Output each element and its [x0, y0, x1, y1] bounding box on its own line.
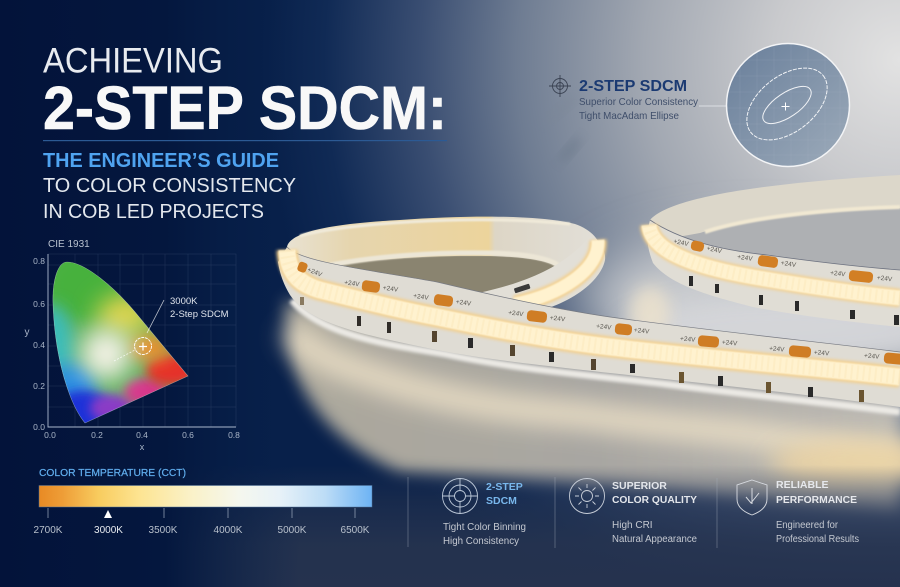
- feature description: [443, 522, 526, 547]
- front strip markings: pills, voltage labels and chips: +24V: [680, 335, 696, 344]
- y axis tick labels: 0.4: [33, 340, 45, 350]
- scale labels: 3500K: [149, 525, 178, 536]
- panel: color temperature scale: [34, 468, 372, 536]
- feature description: Tight Color Binning: [443, 522, 526, 533]
- 3000K pointer: [104, 510, 112, 518]
- panel: feature 2-step SDCM: [442, 478, 526, 547]
- front strip markings: pills, voltage labels and chips: +24V: [549, 315, 566, 324]
- chart axes: [48, 254, 236, 427]
- title line: 2-Step SDCM: 2-STEP SDCM:: [43, 74, 447, 142]
- feature heading: RELIABLE: [776, 479, 828, 491]
- feature heading: [486, 481, 523, 507]
- scale labels: 6500K: [341, 525, 370, 536]
- right loop markings: pills, voltage labels and chips: +24V: [780, 260, 797, 269]
- front strip markings: pills, voltage labels and chips: +24V: [634, 327, 650, 336]
- scale labels: 4000K: [214, 525, 243, 536]
- title: [43, 42, 447, 142]
- leader line: [699, 105, 726, 107]
- x axis tick labels: 0.2: [91, 430, 103, 440]
- 3000K target marker: [114, 300, 164, 361]
- x axis title: x: [140, 442, 145, 452]
- scale ticks: [48, 508, 355, 518]
- front strip markings: pills, voltage labels and chips: +24V: [864, 352, 880, 361]
- y axis tick labels: 0.8: [33, 256, 45, 266]
- feature heading: COLOR QUALITY: [612, 494, 697, 506]
- callout heading: 2-STEP SDCM: [579, 78, 687, 95]
- LED strip: left rear loop: [287, 217, 602, 300]
- y axis tick labels: [33, 256, 45, 432]
- chart grid: [48, 254, 236, 427]
- x axis tick labels: [44, 430, 240, 440]
- front strip markings: pills, voltage labels and chips: +24V: [413, 293, 430, 302]
- chromaticity gamut: [52, 262, 188, 423]
- callout description: Superior Color Consistency: [579, 97, 699, 108]
- x axis tick labels: 0.4: [136, 430, 148, 440]
- LED strip: right rear loop: [647, 175, 900, 327]
- marker callout: 2-Step SDCM: [170, 309, 229, 320]
- feature description: Professional Results: [776, 534, 859, 545]
- subtitle highlight: THE ENGINEER’S GUIDE: [43, 150, 279, 172]
- feature description: [776, 520, 859, 545]
- divider: features: [408, 477, 717, 548]
- feature description: Engineered for: [776, 520, 839, 531]
- y axis title: y: [24, 327, 30, 338]
- right loop markings: pills, voltage labels and chips: +24V: [737, 254, 754, 263]
- right loop markings: pills, voltage labels and chips: +24V: [673, 238, 690, 248]
- front strip markings: pills, voltage labels and chips: [296, 261, 900, 402]
- marker callout: 3000K: [170, 296, 198, 307]
- subtitle: [43, 150, 296, 223]
- feature heading: PERFORMANCE: [776, 494, 857, 506]
- x axis tick labels: 0.0: [44, 430, 56, 440]
- y axis tick labels: 0.2: [33, 381, 45, 391]
- right loop markings: pills, voltage labels and chips: [672, 236, 899, 325]
- scale labels: 2700K: [34, 525, 63, 536]
- front strip markings: pills, voltage labels and chips: +24V: [382, 285, 399, 294]
- subtitle line two: TO COLOR CONSISTENCY: [43, 175, 296, 197]
- x axis tick labels: 0.6: [182, 430, 194, 440]
- scale labels: [34, 525, 370, 536]
- scale labels: 5000K: [278, 525, 307, 536]
- callout: 2-step SDCM ellipse detail: [549, 40, 850, 170]
- feature heading: 2-STEP: [486, 481, 523, 493]
- front strip markings: pills, voltage labels and chips: +24V: [769, 345, 785, 354]
- front strip markings: pills, voltage labels and chips: +24V: [722, 339, 738, 348]
- marker callout: [170, 296, 229, 320]
- x axis tick labels: 0.8: [228, 430, 240, 440]
- right loop markings: pills, voltage labels and chips: +24V: [706, 245, 723, 255]
- title line: Achieving: ACHIEVING: [43, 42, 223, 80]
- front strip markings: pills, voltage labels and chips: +24V: [306, 266, 324, 279]
- y axis tick labels: 0.0: [33, 422, 45, 432]
- feature description: High Consistency: [443, 536, 519, 547]
- front strip markings: pills, voltage labels and chips: +24V: [596, 323, 612, 332]
- chart heading: CIE 1931: [48, 239, 90, 250]
- right loop markings: pills, voltage labels and chips: +24V: [876, 275, 893, 283]
- gradient bar: [39, 486, 372, 507]
- front strip markings: pills, voltage labels and chips: +24V: [814, 349, 830, 358]
- target icon: [549, 75, 571, 97]
- feature heading: [776, 479, 857, 506]
- panel: CIE 1931 chromaticity chart: [24, 239, 240, 452]
- panel: feature reliable performance: [737, 479, 859, 545]
- connector on crossing section: [514, 284, 531, 293]
- feature description: High CRI: [612, 520, 653, 531]
- feature heading: [612, 480, 697, 506]
- feature heading: SDCM: [486, 495, 517, 507]
- LED strip: crossing section: [470, 236, 605, 316]
- feature heading: SUPERIOR: [612, 480, 667, 492]
- icon: target rings: [442, 478, 478, 514]
- subtitle line three: IN COB LED PROJECTS: [43, 201, 264, 223]
- scale heading: COLOR TEMPERATURE (CCT): [39, 468, 186, 479]
- feature description: Natural Appearance: [612, 534, 697, 545]
- callout description: [579, 97, 699, 122]
- front strip markings: pills, voltage labels and chips: +24V: [344, 279, 361, 288]
- front strip markings: pills, voltage labels and chips: +24V: [455, 299, 472, 308]
- feature description: [612, 520, 697, 545]
- icon: shield with check: [737, 480, 767, 515]
- icon: sun in circle: [570, 478, 604, 514]
- front strip markings: pills, voltage labels and chips: +24V: [508, 309, 524, 318]
- magnified lens: [725, 40, 850, 170]
- panel: feature superior color quality: [570, 478, 697, 545]
- LED strip: front section: [278, 247, 900, 412]
- callout description: Tight MacAdam Ellipse: [579, 111, 679, 122]
- y axis tick labels: 0.6: [33, 299, 45, 309]
- right loop markings: pills, voltage labels and chips: +24V: [830, 270, 846, 278]
- scale labels: 3000K: [94, 525, 123, 536]
